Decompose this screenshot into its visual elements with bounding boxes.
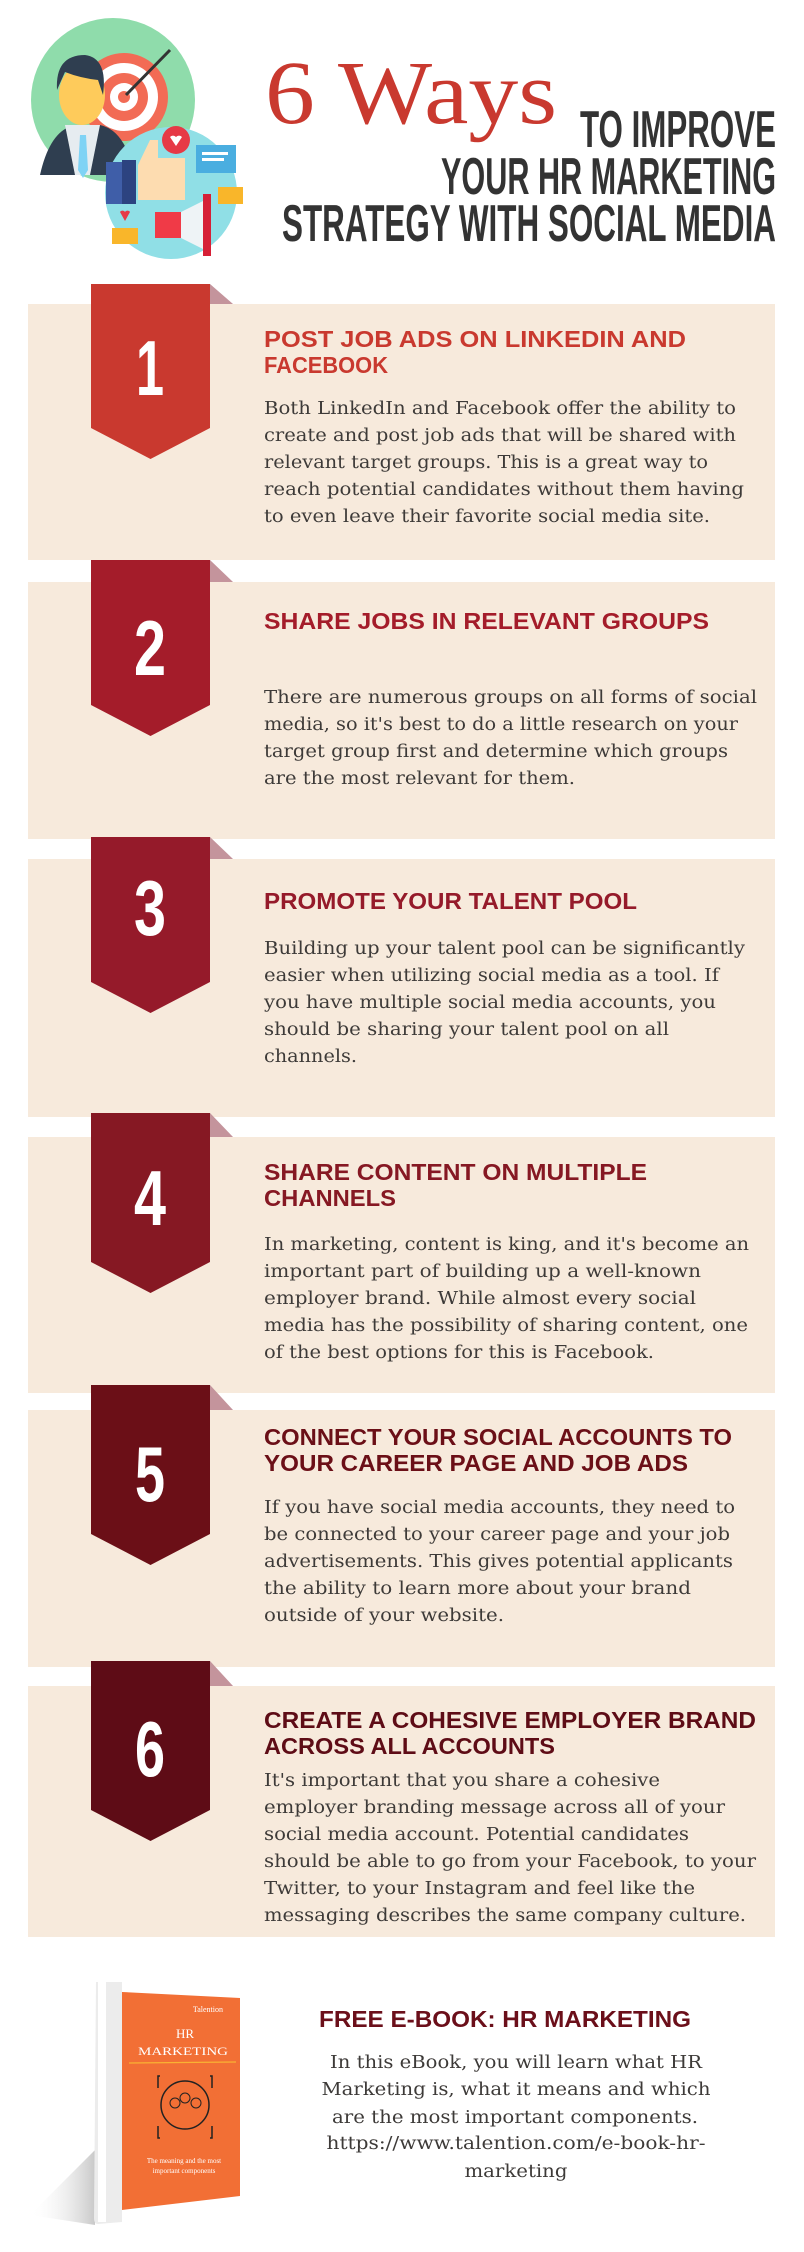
header illustration xyxy=(31,18,243,259)
body 2: There are numerous groups on all forms of social xyxy=(264,688,757,708)
body 6: should be able to go from your Facebook, to your xyxy=(264,1852,757,1872)
ribbon 3 xyxy=(91,837,233,1013)
body 4: media has the possibility of sharing content, one xyxy=(264,1316,748,1336)
body 5: If you have social media accounts, they need to xyxy=(264,1498,735,1518)
heading 4: CHANNELS xyxy=(264,1185,396,1211)
panel 1 xyxy=(28,284,775,560)
ebook heading: FREE E-BOOK: HR MARKETING xyxy=(319,2006,691,2032)
ebook image: Talention xyxy=(193,2005,223,2014)
body 2: target group first and determine which groups xyxy=(264,742,728,762)
body 3: channels. xyxy=(264,1047,357,1067)
body 1 xyxy=(264,399,744,527)
ribbon 5 xyxy=(91,1385,233,1565)
body 1: reach potential candidates without them having xyxy=(264,480,744,500)
body 4 xyxy=(264,1235,749,1363)
body 2: media, so it's best to do a little research on your xyxy=(264,715,739,735)
body 3: Building up your talent pool can be significantly xyxy=(264,939,745,959)
subtitle xyxy=(282,101,776,253)
heading 4 xyxy=(264,1159,647,1211)
ebook description: Marketing is, what it means and which xyxy=(322,2080,710,2100)
title: 6 Ways: 6 Ways xyxy=(265,44,557,143)
ribbon 5: 5 xyxy=(135,1430,165,1518)
heading 2: SHARE JOBS IN RELEVANT GROUPS xyxy=(264,608,709,634)
body 3: you have multiple social media accounts, you xyxy=(263,993,716,1013)
ebook image: HR xyxy=(176,2026,194,2041)
body 1: relevant target groups. This is a great way to xyxy=(264,453,708,473)
ebook description: In this eBook, you will learn what HR xyxy=(330,2053,703,2073)
body 3 xyxy=(263,939,745,1067)
heading 1: FACEBOOK xyxy=(264,352,388,378)
body 1: create and post job ads that will be shared with xyxy=(264,426,736,446)
body 3: easier when utilizing social media as a tool. If xyxy=(264,966,721,986)
heading 5: YOUR CAREER PAGE AND JOB ADS xyxy=(264,1450,688,1476)
ribbon 6 xyxy=(91,1661,233,1841)
heading 1: POST JOB ADS ON LINKEDIN AND xyxy=(264,326,686,352)
heading 3: PROMOTE YOUR TALENT POOL xyxy=(264,888,637,914)
heading 6: CREATE A COHESIVE EMPLOYER BRAND xyxy=(264,1707,756,1733)
body 5 xyxy=(264,1498,735,1626)
body 5: advertisements. This gives potential applicants xyxy=(264,1552,733,1572)
heading 4: SHARE CONTENT ON MULTIPLE xyxy=(264,1159,647,1185)
ebook image xyxy=(30,1982,240,2225)
body 4: important part of building up a well-known xyxy=(264,1262,701,1282)
heading 1 xyxy=(264,326,686,378)
body 5: outside of your website. xyxy=(264,1606,504,1626)
body 2 xyxy=(264,688,757,789)
ebook image: The meaning and the most xyxy=(147,2157,221,2165)
ebook description: https://www.talention.com/e-book-hr- xyxy=(326,2134,706,2154)
body 4: employer brand. While almost every social xyxy=(264,1289,696,1309)
body 5: be connected to your career page and your job xyxy=(264,1525,730,1545)
ebook description: marketing xyxy=(464,2162,568,2182)
ribbon 1 xyxy=(91,284,233,459)
body 1: to even leave their favorite social media site. xyxy=(264,507,710,527)
ebook description xyxy=(322,2053,710,2182)
body 3: should be sharing your talent pool on all xyxy=(264,1020,669,1040)
ribbon 4 xyxy=(91,1113,233,1293)
ribbon 6: 6 xyxy=(135,1705,165,1793)
ribbon 1: 1 xyxy=(136,324,164,412)
body 5: the ability to learn more about your brand xyxy=(264,1579,691,1599)
ebook image: important components xyxy=(153,2167,216,2175)
heading 5: CONNECT YOUR SOCIAL ACCOUNTS TO xyxy=(264,1424,732,1450)
panel 3 xyxy=(28,837,775,1117)
body 6: Twitter, to your Instagram and feel like the xyxy=(264,1879,695,1899)
panel 4 xyxy=(28,1113,775,1393)
body 1: Both LinkedIn and Facebook offer the ability to xyxy=(264,399,736,419)
ebook image: MARKETING xyxy=(138,2044,228,2058)
body 2: are the most relevant for them. xyxy=(264,769,575,789)
ebook description: are the most important components. xyxy=(332,2108,698,2128)
body 4: of the best options for this is Facebook. xyxy=(264,1343,654,1363)
body 6: social media account. Potential candidates xyxy=(264,1825,689,1845)
ribbon 3: 3 xyxy=(134,864,166,952)
heading 5 xyxy=(264,1424,732,1476)
panel 6 xyxy=(28,1661,775,1937)
ribbon 4: 4 xyxy=(134,1154,166,1242)
heading 6: ACROSS ALL ACCOUNTS xyxy=(264,1733,555,1759)
ribbon 2 xyxy=(91,560,233,736)
heading 6 xyxy=(264,1707,756,1759)
body 4: In marketing, content is king, and it's become an xyxy=(264,1235,749,1255)
body 6: messaging describes the same company culture. xyxy=(264,1906,746,1926)
panel 2 xyxy=(28,560,775,839)
body 6: It's important that you share a cohesive xyxy=(264,1771,660,1791)
panel 5 xyxy=(28,1385,775,1667)
body 6 xyxy=(264,1771,757,1926)
ribbon 2: 2 xyxy=(134,604,166,692)
body 6: employer branding message across all of your xyxy=(264,1798,726,1818)
